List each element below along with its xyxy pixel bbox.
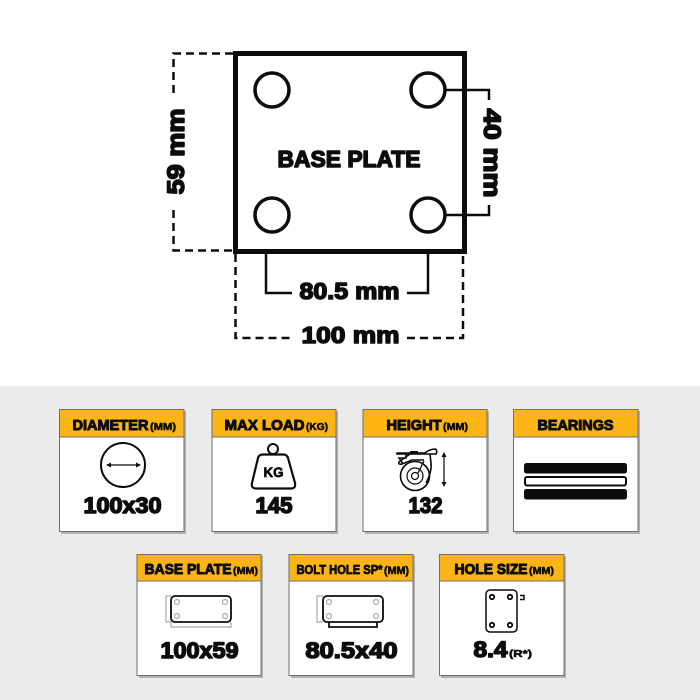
- label: hole size: HOLE SIZE: [454, 561, 528, 578]
- label: unit mm: (MM): [443, 421, 468, 433]
- label: unit mm: (MM): [384, 565, 409, 577]
- card: base plate: [137, 554, 263, 678]
- dimension: 59 mm: 59 mm: [163, 108, 190, 194]
- label: base plate: BASE PLATE: [144, 561, 232, 578]
- card: max load: [212, 410, 338, 534]
- icon: bearings: [524, 463, 627, 500]
- dimension: 80.5 mm: [266, 254, 428, 304]
- card: hole size: [440, 554, 566, 678]
- dimension: 40 mm: [446, 90, 505, 215]
- label: unit mm: (MM): [529, 565, 554, 577]
- value: 100x59: 100x59: [160, 638, 238, 663]
- dimension: 100 mm: [236, 254, 463, 348]
- dimension: 59 mm: [163, 54, 233, 250]
- value: 80.5x40: 80.5x40: [306, 638, 398, 663]
- label: diameter: DIAMETER: [72, 417, 149, 434]
- label: unit radius: (R*): [509, 648, 532, 660]
- value: 8.4: 8.4: [474, 637, 508, 662]
- value: 100x30: 100x30: [84, 493, 162, 518]
- value: 132: 132: [408, 493, 442, 518]
- label: bolt hole spacing: BOLT HOLE SP*: [296, 563, 383, 577]
- value: 145: 145: [256, 493, 292, 518]
- label: unit mm: (MM): [150, 421, 176, 433]
- heading: base plate: BASE PLATE: [278, 146, 420, 172]
- icon: diameter circle: [101, 443, 145, 487]
- label: unit mm: (MM): [233, 565, 258, 577]
- card: height: [363, 410, 489, 534]
- icon: caster wheel: [397, 449, 446, 490]
- label: height: HEIGHT: [386, 417, 442, 434]
- label: max load: MAX LOAD: [224, 417, 305, 434]
- icon: weight: KG: [264, 464, 284, 480]
- panel: specifications background: [0, 386, 700, 700]
- icon: hole plate: [486, 590, 524, 632]
- label: unit kg: (KG): [306, 421, 328, 433]
- base plate outline: [236, 54, 464, 252]
- dimension: 40 mm: 40 mm: [478, 108, 505, 198]
- icon: base plate: [166, 596, 231, 627]
- mounting holes: [255, 73, 445, 232]
- panel: base plate diagram: [163, 54, 505, 348]
- dimension: 100 mm: 100 mm: [302, 322, 400, 348]
- dimension: 80.5 mm: 80.5 mm: [300, 278, 400, 304]
- card: diameter: [60, 410, 186, 534]
- card: bearings: [514, 410, 640, 534]
- label: bearings: BEARINGS: [538, 417, 614, 434]
- icon: bolt hole plate: [317, 596, 383, 627]
- card: bolt hole spacing: [289, 554, 415, 678]
